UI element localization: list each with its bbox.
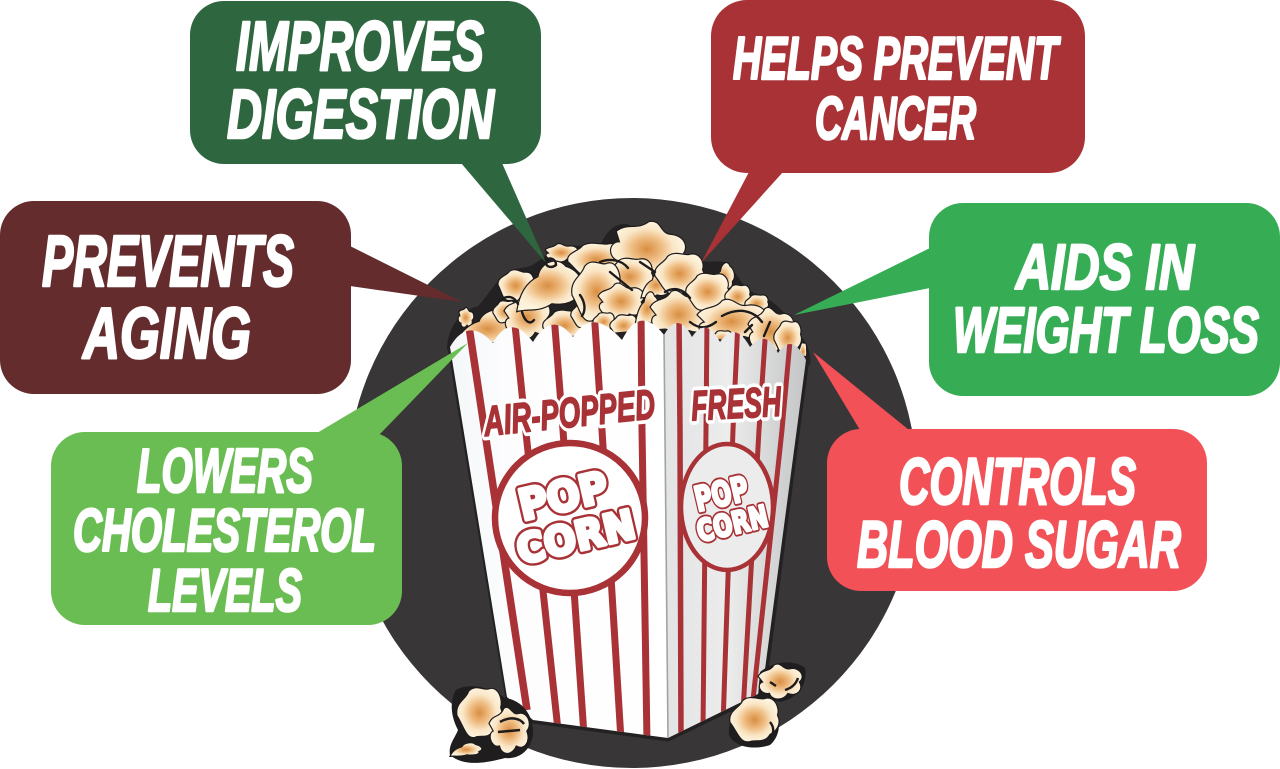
- right panel: [664, 323, 806, 738]
- fresh label: FRESH: [690, 378, 783, 429]
- left seal text: CORN: [512, 502, 640, 574]
- dark background circle: [347, 198, 917, 768]
- left seal text: CORN: [512, 502, 640, 574]
- air-popped label: AIR-POPPED: [481, 380, 657, 445]
- callout: lowers cholesterol levels: [51, 343, 468, 625]
- popcorn box: [449, 310, 808, 742]
- callout: lowers cholesterol levels: CHOLESTEROL: [73, 497, 376, 564]
- right seal text: POP: [691, 469, 752, 520]
- fresh label: FRESH: [690, 378, 783, 429]
- callout: aids in weight loss: AIDS IN: [1014, 231, 1195, 303]
- callout: helps prevent cancer: HELPS PREVENT: [733, 25, 1061, 92]
- left seal text: POP: [514, 462, 613, 530]
- spilled popcorn left: [450, 686, 533, 763]
- left seal text: [502, 458, 640, 574]
- callout: lowers cholesterol levels: LOWERS: [137, 437, 313, 506]
- left panel: [450, 321, 668, 738]
- red stripes: [468, 310, 791, 742]
- callout: controls blood sugar: [813, 352, 1207, 591]
- spilled popcorn right: [729, 662, 806, 748]
- left popcorn seal: [495, 443, 645, 593]
- box fold: [664, 335, 668, 738]
- callout: prevents aging: PREVENTS: [42, 222, 294, 302]
- callout: controls blood sugar: CONTROLS: [899, 444, 1136, 518]
- callout: improves digestion: IMPROVES: [236, 7, 484, 85]
- callout: lowers cholesterol levels: LEVELS: [148, 557, 302, 624]
- callout: helps prevent cancer: CANCER: [815, 85, 976, 152]
- right seal text: POP: [691, 469, 752, 520]
- box dark outline: [449, 330, 808, 740]
- callout: helps prevent cancer: [701, 0, 1085, 263]
- right seal text: CORN: [694, 499, 772, 550]
- right popcorn seal: [681, 444, 773, 570]
- callout: prevents aging: [0, 201, 462, 394]
- callout: improves digestion: [190, 1, 546, 263]
- popcorn heap on top of box: [447, 213, 810, 365]
- fresh label: [690, 378, 783, 429]
- callout: aids in weight loss: [794, 203, 1280, 396]
- callout: prevents aging: AGING: [82, 294, 251, 374]
- air-popped label: AIR-POPPED: [481, 380, 657, 445]
- right seal text: CORN: [694, 499, 772, 550]
- right seal text: [686, 466, 772, 550]
- left seal text: POP: [514, 462, 613, 530]
- air-popped label: [481, 380, 657, 445]
- callout: improves digestion: DIGESTION: [227, 75, 495, 153]
